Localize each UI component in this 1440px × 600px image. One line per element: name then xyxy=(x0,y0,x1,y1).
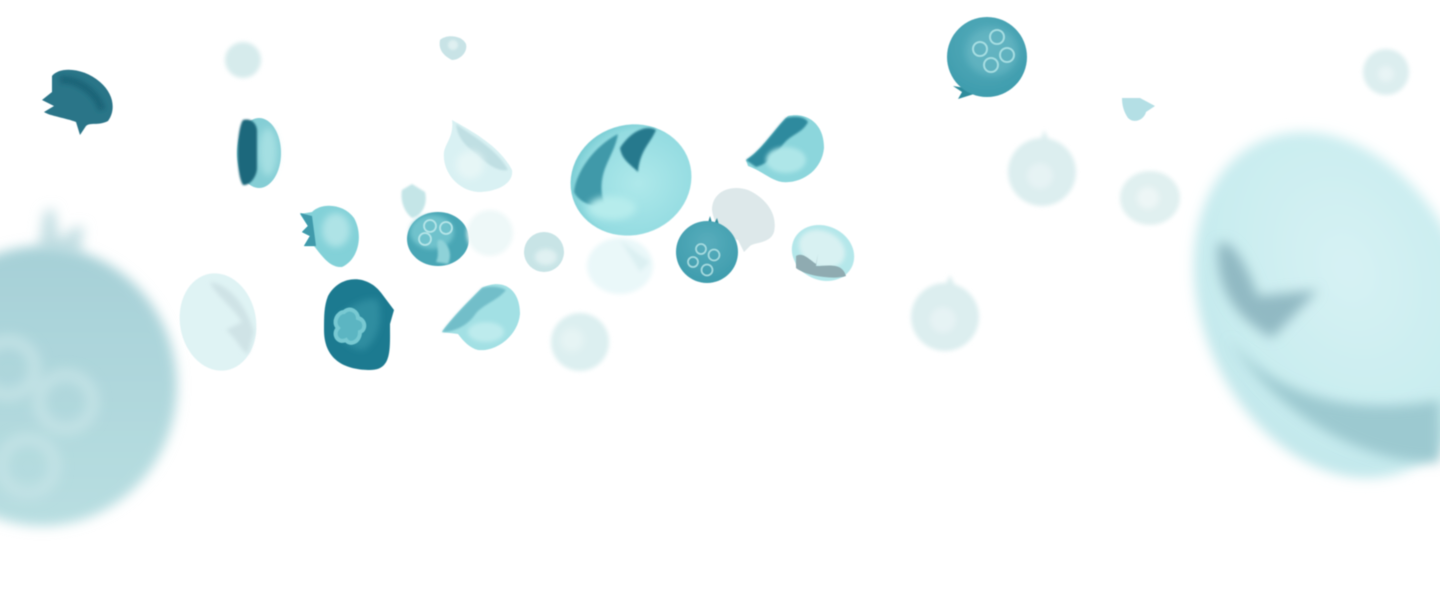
jellyfish: faint lower right xyxy=(911,275,979,351)
jellyfish: large central bell xyxy=(556,109,706,251)
jellyfish: side-on with frill xyxy=(300,206,359,267)
jellyfish: pale bell far right of cluster xyxy=(783,215,863,291)
jellyfish: dark top-left silhouette xyxy=(42,70,113,135)
jellyfish: half-dome dark teal xyxy=(237,118,281,188)
jellyfish: large blurred left foreground xyxy=(0,208,177,526)
jellyfish: faint top small xyxy=(440,36,466,60)
jellyfish: faint small near centre xyxy=(401,184,426,218)
jellyfish: large blurred right foreground xyxy=(1141,87,1440,523)
jellyfish: pale large lower left xyxy=(172,267,264,377)
jellyfish: grey-white bell behind xyxy=(712,188,775,252)
jellyfish: teal with looping core xyxy=(407,212,469,266)
jellyfish: top-right corner faint xyxy=(1363,49,1409,95)
jellyfish: faint lower-centre xyxy=(551,313,609,371)
jellyfish: torn bell upper right xyxy=(746,115,824,182)
jellyfish: faint upper right xyxy=(1008,130,1076,206)
jellyfish: faint top-left small xyxy=(225,42,261,78)
jellyfish: torn bell lower centre xyxy=(442,284,520,350)
jellyfish: top-right teal with rings xyxy=(947,17,1027,99)
jellyfish: pale torn bell xyxy=(444,120,512,192)
jellyfish: deep teal with flower core xyxy=(324,279,394,370)
jellyfish: faint disc behind xyxy=(467,210,513,256)
jellyfish: small grey-teal xyxy=(524,232,564,272)
jellyfish: faint blurred below central bell xyxy=(587,238,653,294)
jellyfish: small teal upper right xyxy=(1122,98,1155,121)
jellyfish: faint right xyxy=(1120,171,1180,225)
jellyfish: round teal with four rings xyxy=(676,216,738,283)
